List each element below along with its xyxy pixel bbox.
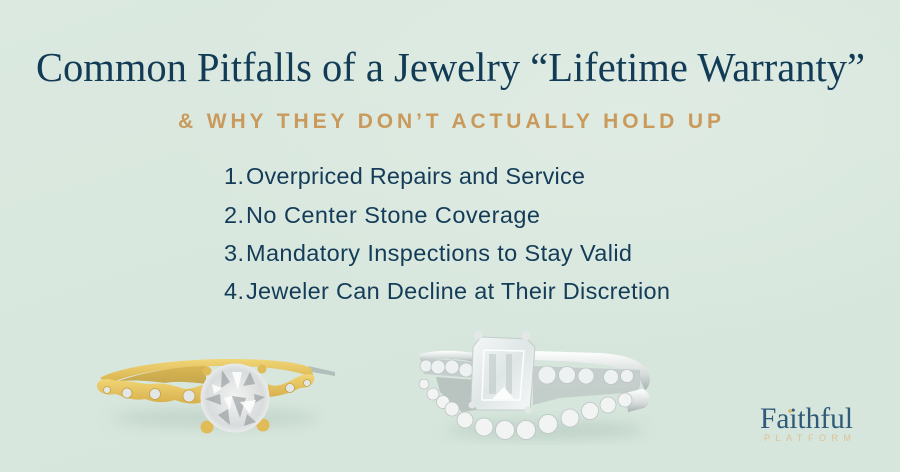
ring set shadow [445,421,645,439]
ring shadow [110,408,320,428]
right band [268,374,314,397]
logo dot [788,409,792,413]
item 2: No Center Stone Coverage [246,202,540,228]
top shank back [420,351,475,362]
center diamond [200,364,270,432]
prongs [200,364,270,434]
logo tagline: PLATFORM [764,433,851,443]
lower band inner shading [436,377,476,412]
silver ring set [419,330,650,440]
item 3: Mandatory Inspections to Stay Valid [246,240,632,266]
shank back arc [100,359,314,384]
top band base [420,358,476,378]
gap between bands [533,386,640,405]
shank inner surface [116,366,206,384]
logo [760,402,853,443]
subtitle: & WHY THEY DON’T ACTUALLY HOLD UP [178,110,721,133]
gold ring [97,359,335,434]
right cast shadow [308,366,335,376]
numbered list [224,163,670,304]
side stones [104,380,310,402]
logo wordmark: Faithful [760,402,853,435]
item 1: 1. [224,163,244,189]
scalloped front band [97,379,206,404]
lower shank right [625,389,649,412]
item 1: Overpriced Repairs and Service [246,163,585,189]
wedding band stones [419,379,632,440]
item 3: 3. [224,240,244,266]
item 2: 2. [224,202,244,228]
item 4: Jeweler Can Decline at Their Discretion [246,278,670,304]
prongs [468,330,532,414]
item 4: 4. [224,278,244,304]
top band stones [420,360,634,384]
title: Common Pitfalls of a Jewelry “Lifetime Warranty” [36,44,865,90]
emerald-cut center stone [471,337,535,410]
